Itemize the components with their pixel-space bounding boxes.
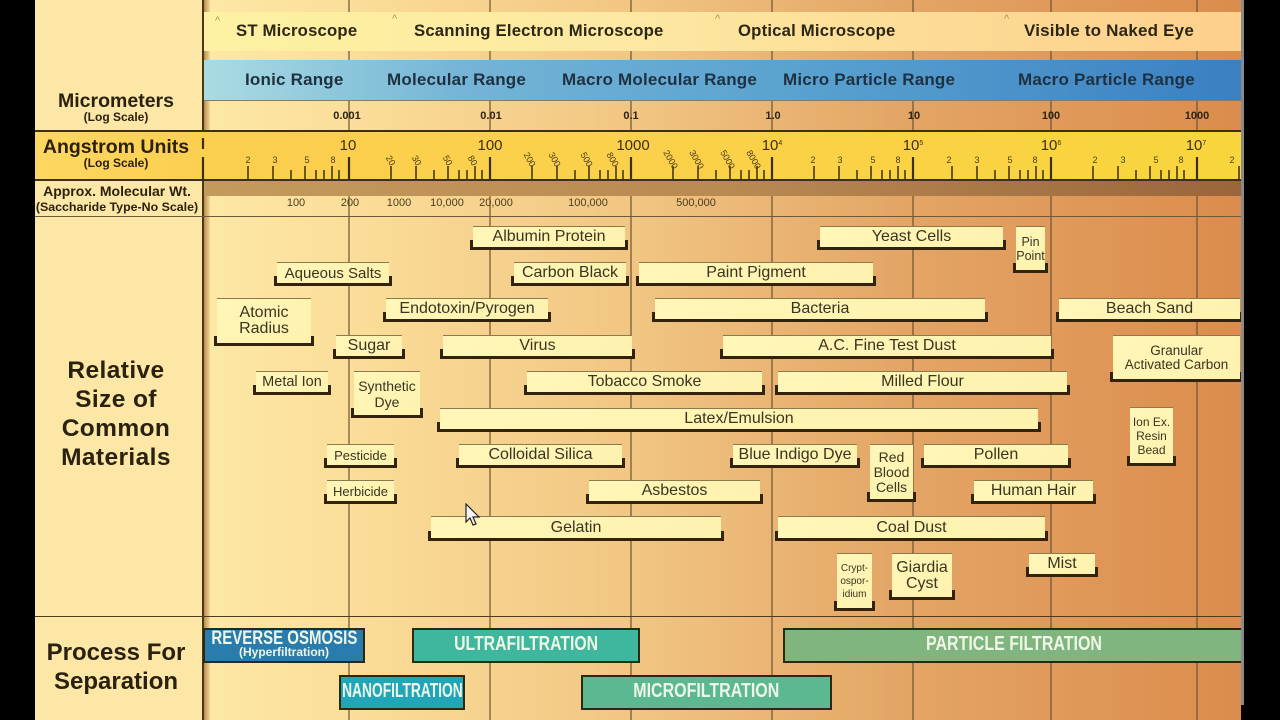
angstrom ticks: 10 xyxy=(1041,137,1057,154)
molecular weight values: 1000 xyxy=(387,197,411,209)
angstrom ticks: 3 xyxy=(272,155,278,165)
process: microfiltration: MICROFILTRATION xyxy=(633,680,780,702)
box: Mist xyxy=(1026,553,1098,577)
molecular weight heading: (Saccharide Type-No Scale) xyxy=(36,200,198,214)
micrometer scale values xyxy=(333,110,1209,122)
microscope band xyxy=(204,12,1241,51)
micrometers heading xyxy=(58,90,174,124)
angstrom ticks: 8 xyxy=(1032,155,1038,165)
relative size heading: Size of xyxy=(75,386,157,413)
particle range band: Molecular Range xyxy=(387,70,526,89)
process: reverse osmosis xyxy=(203,628,365,663)
box: Red Blood Cells: Cells xyxy=(876,478,907,494)
box: Ion Ex. Resin Bead xyxy=(1127,407,1176,466)
molecular weight values xyxy=(287,197,716,209)
angstrom ticks: 10 xyxy=(1186,137,1202,154)
particle range band: Macro Molecular Range xyxy=(562,70,757,89)
icon: mouse cursor xyxy=(464,503,482,527)
angstrom heading: (Log Scale) xyxy=(84,156,148,170)
box: Blue Indigo Dye xyxy=(730,444,860,468)
angstrom ticks: 5 xyxy=(1153,155,1159,165)
angstrom ticks: 2 xyxy=(810,155,816,165)
angstrom ticks: 100 xyxy=(477,137,503,154)
box: Granular Activated Carbon xyxy=(1110,335,1241,382)
particle range band: Macro Particle Range xyxy=(1018,70,1195,89)
molecular weight divider xyxy=(35,216,1241,217)
box: Latex/Emulsion xyxy=(437,408,1041,432)
box: Virus: Virus xyxy=(519,337,556,354)
angstrom ticks: 10 xyxy=(903,137,919,154)
box: Pin Point: Pin xyxy=(1021,234,1040,248)
box: Colloidal Silica: Colloidal Silica xyxy=(488,446,593,463)
angstrom heading xyxy=(43,136,189,170)
box: Blue Indigo Dye: Blue Indigo Dye xyxy=(739,446,851,463)
left label column xyxy=(35,0,203,720)
process: ultrafiltration xyxy=(412,628,640,663)
process: particle filtration: PARTICLE FILTRATION xyxy=(925,632,1101,654)
box: Human Hair: Human Hair xyxy=(991,482,1076,499)
process: nanofiltration: NANOFILTRATION xyxy=(342,680,462,702)
angstrom ticks: 50 xyxy=(441,154,454,167)
box: Giardia Cyst: Cyst xyxy=(906,574,938,592)
angstrom ticks: 8000 xyxy=(744,148,763,171)
angstrom ticks: 6 xyxy=(1057,140,1061,147)
box: Aqueous Salts xyxy=(274,262,392,286)
box: Cryptosporidium xyxy=(834,553,875,611)
process heading: Process For xyxy=(47,639,185,666)
box: Paint Pigment xyxy=(636,262,876,286)
box: Carbon Black xyxy=(511,262,629,286)
box: Milled Flour: Milled Flour xyxy=(881,373,964,390)
box: Virus xyxy=(440,335,635,359)
angstrom ticks: 1000 xyxy=(616,137,650,154)
box: Asbestos: Asbestos xyxy=(642,482,707,499)
process: nanofiltration xyxy=(339,675,465,710)
micrometer scale values: 0.01 xyxy=(480,110,502,122)
process section divider xyxy=(35,616,1241,617)
microscope band: ST Microscope xyxy=(236,21,357,40)
box: Bacteria xyxy=(652,298,988,322)
box: Synthetic Dye: Synthetic xyxy=(358,378,416,394)
box: Albumin Protein xyxy=(470,226,628,250)
box: Yeast Cells: Yeast Cells xyxy=(872,228,951,245)
box: Human Hair xyxy=(971,480,1096,504)
box: Tobacco Smoke xyxy=(524,371,765,395)
angstrom ticks: 7 xyxy=(1202,140,1206,147)
micrometer scale values: 1.0 xyxy=(765,110,781,122)
process: reverse osmosis: REVERSE OSMOSIS xyxy=(211,628,357,648)
angstrom band xyxy=(35,130,1241,181)
molecular weight values: 10,000 xyxy=(430,197,464,209)
angstrom heading: Angstrom Units xyxy=(43,136,189,158)
box: Pesticide: Pesticide xyxy=(334,448,387,462)
angstrom ticks: 8 xyxy=(330,155,336,165)
box: Milled Flour xyxy=(775,371,1070,395)
box: Beach Sand xyxy=(1056,298,1241,322)
box: Gelatin: Gelatin xyxy=(551,518,601,536)
box: Yeast Cells xyxy=(817,226,1006,250)
angstrom ticks: 2 xyxy=(1229,155,1235,165)
box: Red Blood Cells xyxy=(867,444,916,502)
molecular weight values: 500,000 xyxy=(676,197,716,209)
angstrom ticks: 2 xyxy=(1092,155,1098,165)
angstrom ticks: 5 xyxy=(1007,155,1013,165)
box: Ion Ex. Resin Bead: Resin xyxy=(1136,428,1167,442)
angstrom ticks: 500 xyxy=(579,150,595,169)
box: Cryptosporidium: ospor- xyxy=(840,576,869,586)
micrometers heading: Micrometers xyxy=(58,90,174,112)
angstrom ticks: 5 xyxy=(304,155,310,165)
angstrom ticks: 80 xyxy=(466,154,479,167)
process: reverse osmosis: (Hyperfiltration) xyxy=(239,644,329,658)
box: Paint Pigment: Paint Pigment xyxy=(706,264,806,281)
box: Atomic Radius: Radius xyxy=(239,320,289,337)
box: Coal Dust xyxy=(775,516,1048,541)
box: Pin Point: Point xyxy=(1016,248,1045,262)
molecular weight values: 20,000 xyxy=(479,197,513,209)
angstrom ticks: 2 xyxy=(245,155,251,165)
process heading: Separation xyxy=(54,668,178,695)
microscope band: ^ xyxy=(715,13,720,25)
process: ultrafiltration: ULTRAFILTRATION xyxy=(454,632,598,654)
left axis bar xyxy=(202,0,204,720)
angstrom ticks: 3 xyxy=(1120,155,1126,165)
box: Ion Ex. Resin Bead: Bead xyxy=(1137,442,1166,456)
relative size heading xyxy=(61,357,171,471)
process heading xyxy=(35,638,197,696)
particle range band xyxy=(204,60,1241,101)
angstrom ticks: 200 xyxy=(522,150,538,169)
box: Bacteria: Bacteria xyxy=(791,300,849,317)
process: microfiltration xyxy=(581,675,832,710)
box: Pollen: Pollen xyxy=(974,446,1018,463)
box: Pollen xyxy=(921,444,1071,468)
relative size heading: Relative xyxy=(67,357,165,384)
angstrom ticks: 2 xyxy=(946,155,952,165)
box: Sugar xyxy=(333,335,405,359)
box: Synthetic Dye: Dye xyxy=(375,394,399,410)
box: Mist: Mist xyxy=(1047,555,1077,572)
right black margin xyxy=(1244,0,1280,720)
microscope band: ^ xyxy=(215,15,220,27)
angstrom ticks: 3000 xyxy=(687,148,706,171)
box: Granular Activated Carbon: Granular xyxy=(1150,342,1203,358)
angstrom ticks: 300 xyxy=(547,150,563,169)
molecular weight heading: Approx. Molecular Wt. xyxy=(43,183,191,199)
box: Endotoxin/Pyrogen: Endotoxin/Pyrogen xyxy=(399,300,535,317)
box: Atomic Radius: Atomic xyxy=(240,304,288,321)
molecular weight values: 200 xyxy=(341,197,359,209)
molecular weight values: 100,000 xyxy=(568,197,608,209)
box: Endotoxin/Pyrogen xyxy=(383,298,551,322)
box: Sugar: Sugar xyxy=(348,337,390,354)
box: Red Blood Cells: Red xyxy=(879,448,904,464)
particle range band: Ionic Range xyxy=(245,70,344,89)
angstrom ticks: 800 xyxy=(605,150,621,169)
angstrom ticks: 10 xyxy=(762,137,778,154)
relative size heading: Common xyxy=(62,415,170,442)
box: Latex/Emulsion: Latex/Emulsion xyxy=(684,410,794,427)
box: Red Blood Cells: Blood xyxy=(874,464,909,480)
box: Albumin Protein: Albumin Protein xyxy=(493,228,605,245)
box: Giardia Cyst xyxy=(889,553,955,600)
box: Giardia Cyst: Giardia xyxy=(896,558,948,576)
angstrom ticks: 5 xyxy=(919,140,923,147)
molecular weight band xyxy=(204,181,1241,196)
box: Colloidal Silica xyxy=(456,444,625,468)
box: Herbicide: Herbicide xyxy=(333,484,388,498)
box: Synthetic Dye xyxy=(351,371,423,418)
box: Cryptosporidium: Crypt- xyxy=(841,562,868,574)
microscope band: ^ xyxy=(1004,13,1009,25)
particle range band: Micro Particle Range xyxy=(783,70,955,89)
microscope band: Visible to Naked Eye xyxy=(1024,21,1194,40)
microscope band: ^ xyxy=(392,13,397,25)
box: A.C. Fine Test Dust xyxy=(720,335,1054,359)
angstrom ticks: 4 xyxy=(778,140,782,147)
relative size heading: Materials xyxy=(61,444,171,471)
angstrom ticks: 20 xyxy=(384,154,397,167)
angstrom ticks: 5000 xyxy=(718,148,737,171)
angstrom ticks: 3 xyxy=(837,155,843,165)
box: Pesticide xyxy=(324,444,397,468)
micrometer scale values: 10 xyxy=(908,110,920,122)
micrometer scale values: 1000 xyxy=(1185,110,1209,122)
angstrom ticks: 3 xyxy=(974,155,980,165)
microscope band: Optical Microscope xyxy=(738,21,896,40)
box: Granular Activated Carbon: Activated Carbon xyxy=(1125,356,1228,372)
box: Aqueous Salts: Aqueous Salts xyxy=(285,264,381,282)
micrometer scale values: 0.1 xyxy=(623,110,639,122)
molecular weight values: 100 xyxy=(287,197,305,209)
box: A.C. Fine Test Dust: A.C. Fine Test Dust xyxy=(818,337,956,354)
box: Coal Dust: Coal Dust xyxy=(876,518,947,536)
box: Gelatin xyxy=(428,516,724,541)
box: Carbon Black: Carbon Black xyxy=(522,264,618,281)
box: Asbestos xyxy=(586,480,763,504)
box: Tobacco Smoke: Tobacco Smoke xyxy=(588,373,701,390)
box: Beach Sand: Beach Sand xyxy=(1106,300,1193,317)
angstrom ticks: 8 xyxy=(895,155,901,165)
box: Cryptosporidium: idium xyxy=(843,588,866,600)
box: Metal Ion: Metal Ion xyxy=(262,374,322,390)
micrometers heading: (Log Scale) xyxy=(84,110,148,124)
right edge strip xyxy=(1241,0,1244,705)
angstrom ticks: 2000 xyxy=(661,148,680,171)
process: particle filtration xyxy=(783,628,1244,663)
angstrom ticks: 5 xyxy=(870,155,876,165)
micrometer scale values: 100 xyxy=(1042,110,1060,122)
box: Pin Point xyxy=(1013,226,1048,273)
angstrom ticks: 8 xyxy=(1178,155,1184,165)
angstrom ticks: 30 xyxy=(410,154,423,167)
angstrom ticks: 10 xyxy=(340,137,356,154)
molecular weight heading xyxy=(36,183,198,214)
angstrom ticks xyxy=(202,137,1240,179)
box: Ion Ex. Resin Bead: Ion Ex. xyxy=(1133,414,1170,428)
box: Atomic Radius xyxy=(214,298,314,346)
box: Herbicide xyxy=(324,480,397,504)
microscope band: Scanning Electron Microscope xyxy=(414,21,663,40)
box: Metal Ion xyxy=(253,371,331,395)
micrometer scale values: 0.001 xyxy=(333,110,361,122)
